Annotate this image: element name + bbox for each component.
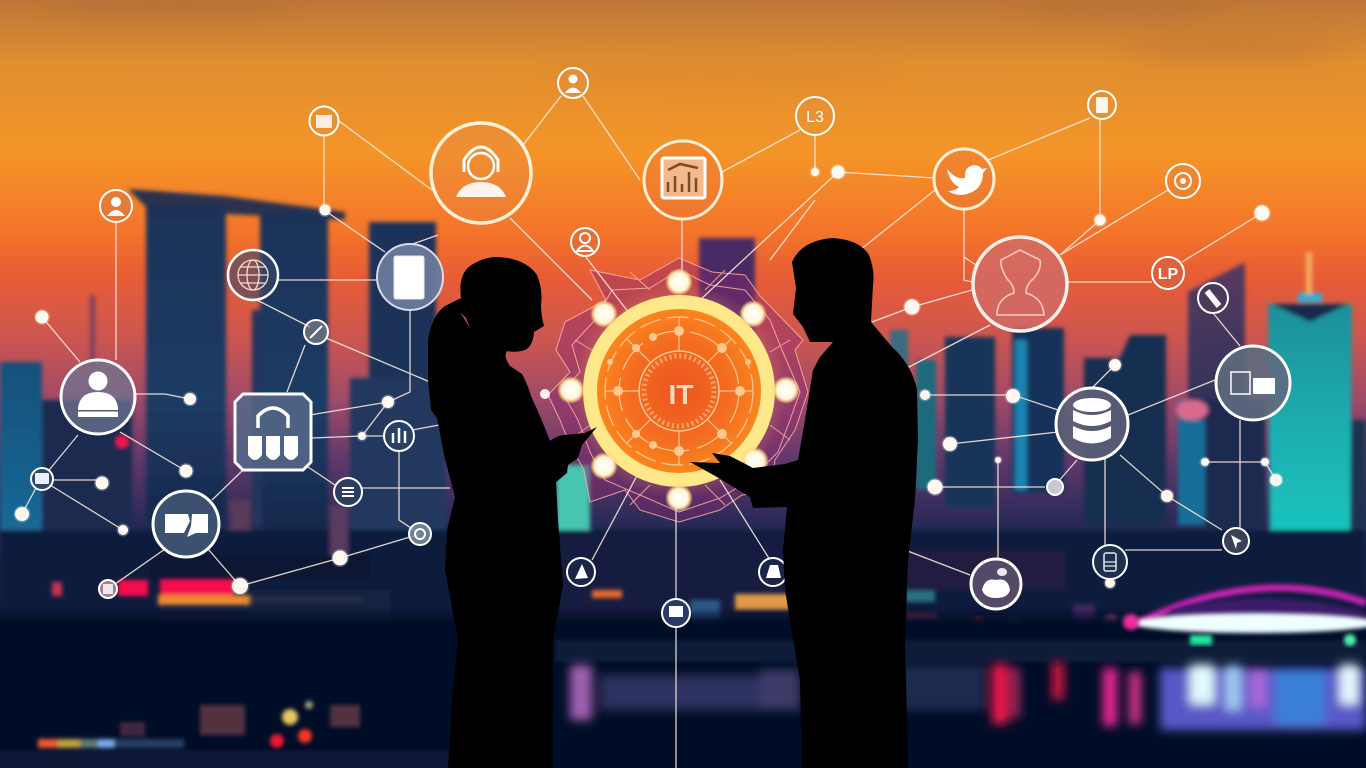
distant antenna	[90, 295, 95, 365]
icon: cursor node	[1223, 528, 1249, 554]
water reflections	[570, 662, 1366, 730]
glowing hub nodes	[540, 268, 800, 512]
icon: person profile circle	[973, 237, 1067, 331]
teal tower	[1268, 252, 1352, 555]
lower city	[0, 500, 1366, 645]
icon: twitter bird	[934, 149, 994, 209]
icon: bars node	[384, 421, 414, 451]
shoreline lights on the left	[38, 701, 360, 748]
icon: devices	[1216, 346, 1290, 420]
icon: list node	[334, 478, 362, 506]
hub node markers	[607, 326, 751, 456]
icon: server node	[1093, 545, 1127, 579]
blurred city skyline	[0, 189, 1366, 645]
icon: L3 badge	[796, 97, 834, 135]
icon: analytics screen	[644, 141, 722, 219]
icon: user with card	[61, 360, 135, 434]
Marina Bay towers	[128, 189, 345, 532]
mandala around hub	[548, 258, 808, 522]
right towers	[890, 262, 1366, 550]
icon: center avatar	[571, 228, 599, 256]
hub circuit rings	[605, 317, 753, 465]
icon: large headset support	[431, 123, 531, 223]
icon: spiral badge	[1166, 164, 1200, 198]
water and foreground shore	[0, 615, 1366, 768]
icon: magnifier node	[304, 320, 328, 344]
icon: small square left	[99, 580, 117, 598]
city lights	[52, 435, 1118, 647]
silhouette: man	[690, 238, 918, 768]
hub label: IT	[669, 379, 693, 410]
icon: phone badge	[1088, 91, 1116, 119]
icon: LP badge: LP	[1158, 266, 1179, 283]
icon: wrench badge	[1198, 283, 1228, 313]
icon: top briefcase	[310, 106, 338, 136]
central IT hub	[571, 283, 787, 499]
icon: LP badge	[1152, 257, 1184, 289]
icon: top avatar	[558, 68, 588, 98]
icon: small monitor left	[31, 468, 53, 490]
small icon nodes	[31, 68, 1249, 627]
icon: small avatar	[100, 190, 132, 222]
icon: monitor node bottom	[662, 599, 690, 627]
icon: globe	[228, 250, 278, 300]
icon: padlock	[235, 394, 311, 470]
silhouette: woman	[428, 257, 597, 768]
ponytail gap	[460, 312, 470, 328]
mid towers left	[0, 222, 755, 568]
icon: L3 badge: L3	[806, 109, 824, 126]
icon: chip node	[409, 523, 431, 545]
icon: chat bubbles	[153, 491, 219, 557]
icon: bag node	[759, 558, 787, 586]
icon: apple	[971, 559, 1021, 609]
neon bridge	[1123, 588, 1366, 646]
sky clouds	[50, 0, 1340, 78]
icon: database	[1056, 388, 1128, 460]
icon: tablet	[377, 244, 443, 310]
network dots	[15, 166, 1282, 594]
icon: document node	[567, 558, 595, 586]
